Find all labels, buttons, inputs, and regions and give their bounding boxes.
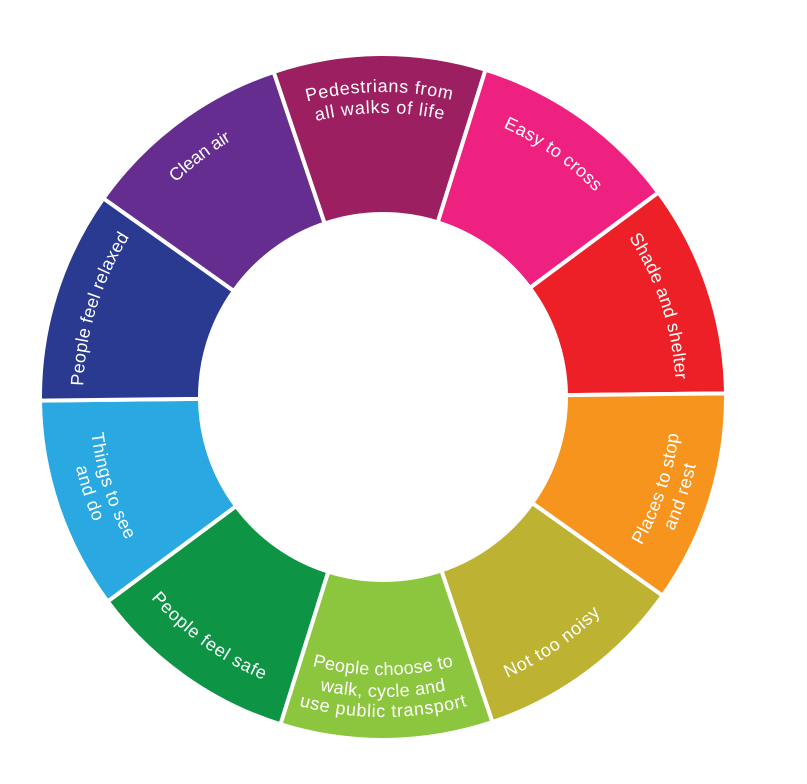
panel: things to see and do — [42, 401, 236, 602]
panel: clean air — [104, 73, 326, 292]
segment: easy to cross — [397, 56, 668, 317]
label: things to see and do: Things to seeand do — [76, 432, 133, 538]
panel: pedestrians from all walks of life — [276, 56, 483, 221]
label: people feel safe: People feel safe — [152, 591, 266, 678]
segment: clean air — [93, 58, 364, 320]
segment: people feel relaxed — [24, 193, 249, 446]
label: easy to cross: Easy to cross — [504, 116, 600, 190]
panel: shade and shelter — [530, 192, 724, 393]
segment: shade and shelter — [514, 187, 742, 442]
segment: people choose — [279, 570, 493, 741]
label: clean air: Clean air — [170, 132, 229, 180]
label: people choose to walk, cycle and use public transport: People choose to walk, cycle anduse public transport — [300, 654, 467, 718]
segment: things to see — [24, 352, 252, 607]
panel: people feel safe — [110, 509, 330, 723]
label: people feel relaxed: People feel relaxed — [70, 231, 129, 384]
segment: places to stop — [517, 348, 742, 601]
segment: not too noisy — [402, 474, 673, 736]
panel: not too noisy — [444, 502, 662, 720]
segment: pedestrians — [273, 53, 487, 224]
label: pedestrians: Pedestrians from all walks of life — [306, 79, 452, 120]
label: not too noisy: Not too noisy — [503, 606, 599, 678]
panel: easy to cross — [436, 71, 656, 285]
label: places to stop and rest: Places to stop and rest — [632, 434, 696, 544]
label: shade and shelter: Shade and shelter — [630, 233, 686, 379]
panel: places to stop and rest — [535, 391, 724, 593]
panel: people choose to walk, cycle and use public transport — [283, 572, 494, 738]
panel: people feel relaxed — [42, 201, 232, 403]
segment: people feel safe — [98, 477, 369, 738]
